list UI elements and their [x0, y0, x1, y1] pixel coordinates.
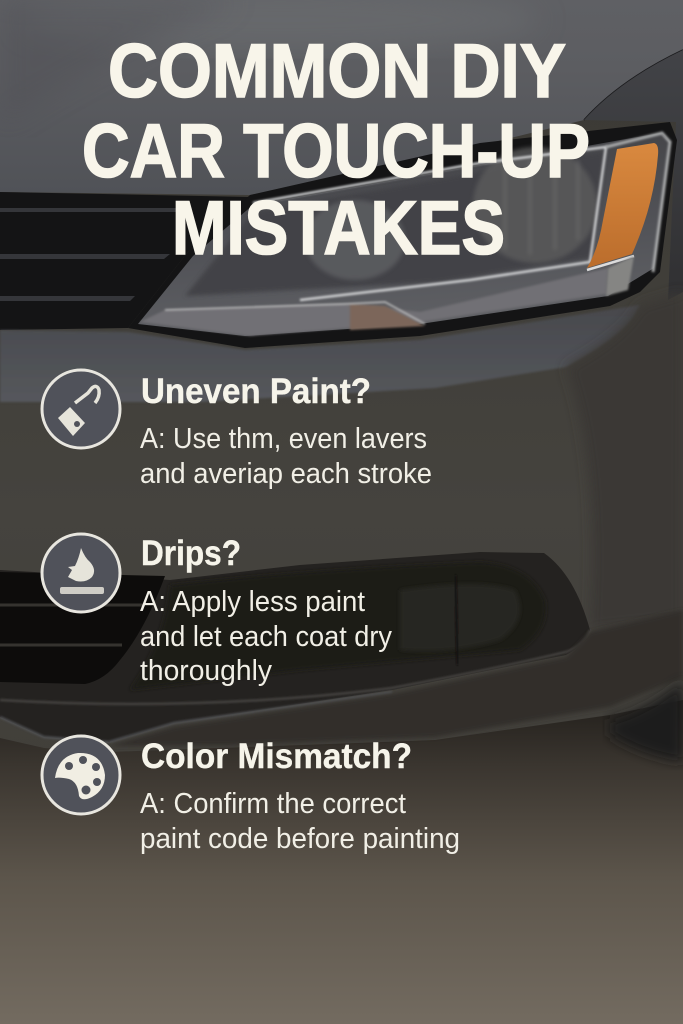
title: MISTAKES	[172, 186, 505, 271]
amber indicator	[587, 143, 658, 268]
item: uneven paint	[42, 370, 432, 490]
projector lens shapes	[305, 200, 405, 280]
upper bumper band	[0, 305, 640, 402]
title: COMMON DIY	[108, 29, 566, 114]
chrome trim	[253, 147, 606, 300]
heading: Uneven Paint?	[141, 372, 371, 411]
headlight assembly	[128, 122, 677, 348]
lower right fender area	[566, 292, 683, 630]
upper grille	[0, 192, 250, 330]
answer text: and averiap each stroke	[140, 458, 432, 490]
icon: palette	[42, 736, 120, 814]
ground	[0, 700, 683, 1024]
heading: Color Mismatch?	[141, 737, 412, 776]
icon: drip on line	[42, 534, 120, 612]
front fender	[584, 50, 683, 300]
lower lamp strip	[140, 268, 608, 336]
answer text: thoroughly	[140, 655, 272, 687]
answer text: A: Apply less paint	[140, 586, 365, 618]
tire	[610, 680, 683, 762]
answer text: and let each coat dry	[140, 621, 392, 653]
heading: Drips?	[141, 534, 241, 573]
item: color mismatch	[42, 736, 460, 855]
lower intake and lip	[0, 552, 590, 742]
lower bumper skirt	[109, 610, 683, 746]
answer text: A: Confirm the correct	[140, 788, 406, 820]
left lower grille	[0, 572, 165, 684]
title: CAR TOUCH-UP	[82, 109, 590, 194]
answer text	[140, 788, 460, 855]
hood panel	[0, 0, 683, 195]
title	[82, 29, 590, 271]
item: drips	[42, 534, 392, 687]
answer text	[140, 423, 432, 490]
icon: paint brush	[42, 370, 120, 448]
answer text: A: Use thm, even lavers	[140, 423, 427, 455]
answer text: paint code before painting	[140, 823, 460, 855]
answer text	[140, 586, 392, 687]
